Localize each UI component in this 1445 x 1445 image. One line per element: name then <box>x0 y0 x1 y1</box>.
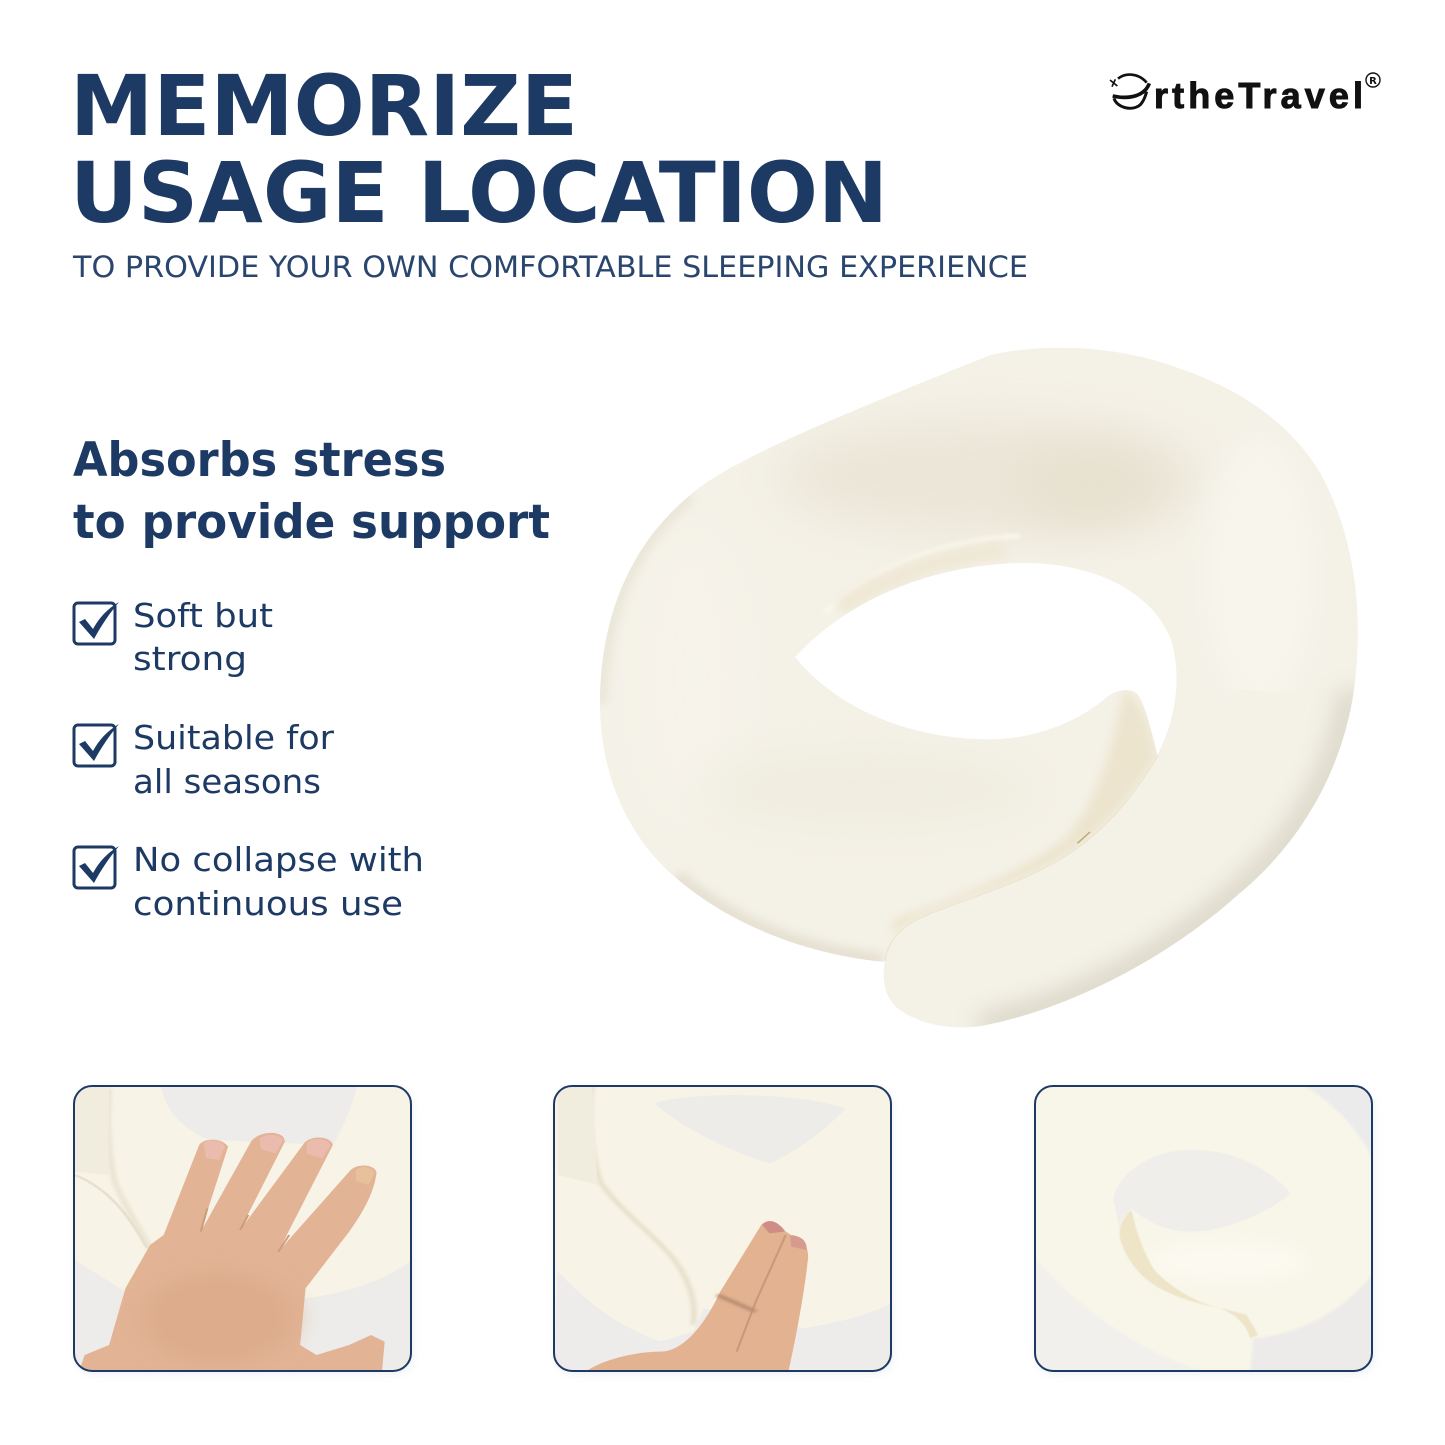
slit shadow <box>1078 832 1090 843</box>
logo: OrtheTravel: rtheTravel <box>1154 75 1363 116</box>
item: soft but strong: strong <box>133 639 247 678</box>
pillow hole <box>795 563 1177 755</box>
icon: checkbox <box>74 602 119 644</box>
item: no collapse: continuous use <box>133 884 403 923</box>
item: soft but strong <box>74 596 273 678</box>
item: no collapse <box>74 840 424 923</box>
fingers <box>587 1221 808 1371</box>
title: MEMORIZE <box>70 57 578 155</box>
photo: fingers pressing pillow <box>551 1082 906 1375</box>
heading: absorbs stress: Absorbs stress <box>73 433 446 488</box>
feature list <box>74 596 424 923</box>
heading: absorbs stress: to provide support <box>73 495 550 550</box>
subtitle: TO PROVIDE YOUR OWN COMFORTABLE SLEEPING EXPERIENCE <box>72 250 1028 284</box>
heading: absorbs stress <box>73 433 550 550</box>
item: suitable for all seasons: Suitable for <box>133 718 334 757</box>
pillow tail <box>885 685 1354 1027</box>
main pillow illustration <box>590 337 1370 1042</box>
photo frame <box>74 1086 411 1371</box>
title: USAGE LOCATION <box>70 144 888 242</box>
photo frame <box>554 1086 891 1371</box>
ledge line <box>976 534 1018 541</box>
photo: pillow close-up <box>1030 1082 1377 1375</box>
icon: registered mark: R <box>1369 76 1377 87</box>
hand <box>79 1133 385 1372</box>
title <box>70 57 888 242</box>
item: suitable for all seasons <box>74 718 334 801</box>
slit <box>1120 1210 1258 1338</box>
item: suitable for all seasons: all seasons <box>133 762 321 801</box>
photo: hand pressing pillow <box>71 1082 420 1375</box>
icon: checkbox <box>74 846 119 888</box>
item: no collapse: No collapse with <box>133 840 424 879</box>
icon: registered mark <box>1366 73 1380 87</box>
photo frame <box>1035 1086 1372 1371</box>
icon: checkbox <box>74 724 119 766</box>
item: soft but strong: Soft but <box>133 596 273 635</box>
underside facet of inner end <box>893 690 1158 938</box>
hole <box>1113 1150 1291 1232</box>
icon: globe with plane <box>1110 75 1149 108</box>
